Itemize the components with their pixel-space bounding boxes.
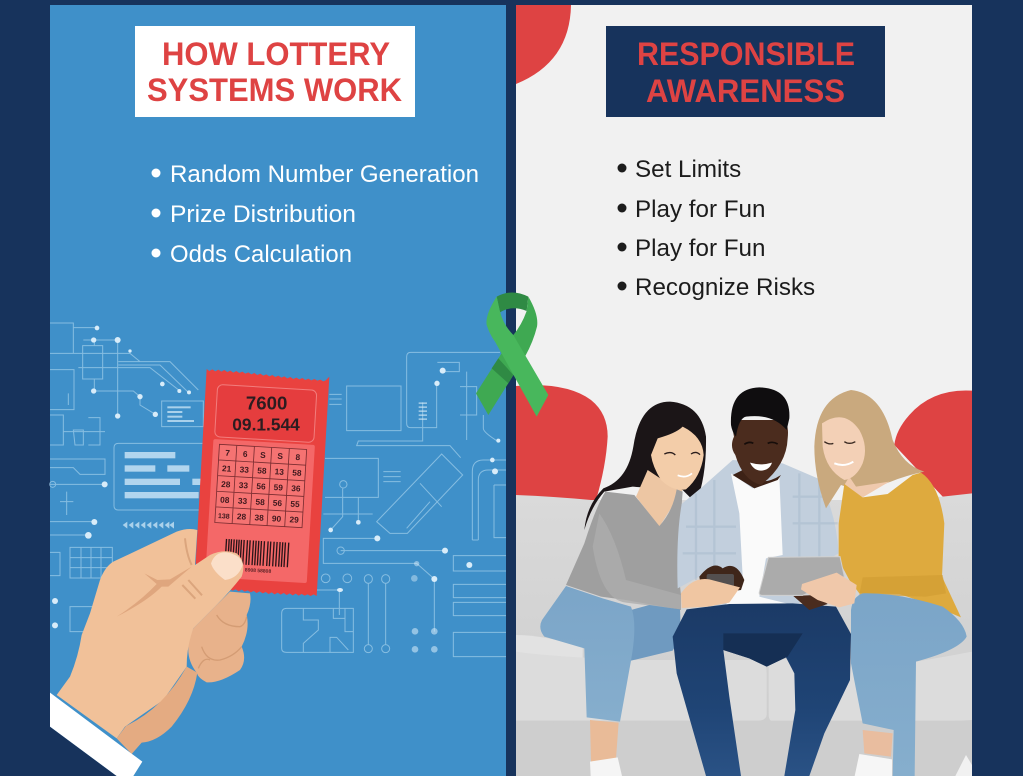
- shirt cuff: [50, 693, 142, 776]
- lottery ticket: 56: [273, 498, 283, 508]
- bullet list: awareness: [618, 156, 815, 301]
- heading box: how lottery systems work: SYSTEMS WORK: [147, 72, 402, 108]
- lottery ticket: 36: [291, 483, 301, 494]
- lottery ticket: 13: [274, 466, 285, 477]
- heading box: how lottery systems work: [135, 26, 415, 117]
- bullet list: awareness: Play for Fun: [635, 235, 765, 262]
- heading box: responsible awareness: RESPONSIBLE: [637, 36, 855, 72]
- bullet list: lottery: Random Number Generation: [170, 161, 479, 188]
- lottery ticket: 8908 58808: [245, 567, 272, 575]
- panel: how lottery systems work: [50, 5, 506, 776]
- bullet list: awareness: Recognize Risks: [635, 274, 815, 301]
- sofa: [516, 493, 972, 776]
- lottery ticket: 7600: [246, 392, 287, 413]
- bullet list: lottery: [152, 161, 479, 268]
- lottery ticket: 55: [290, 499, 300, 509]
- lottery ticket: 09.1.544: [232, 415, 300, 435]
- heading box: responsible awareness: AWARENESS: [646, 73, 845, 109]
- circuit background illustration: [50, 323, 506, 657]
- thumb nail: [211, 552, 243, 580]
- panel: responsible awareness: [516, 5, 972, 776]
- lottery ticket: 56: [256, 481, 266, 491]
- lottery ticket: 21: [222, 463, 232, 474]
- curled fingers: [188, 592, 251, 682]
- lottery ticket: 08: [220, 494, 230, 505]
- icon: green awareness ribbon: [476, 292, 548, 417]
- lottery ticket: 90: [272, 513, 282, 524]
- bullet list: awareness: Play for Fun: [635, 196, 765, 223]
- lottery ticket: 33: [238, 496, 248, 506]
- lottery ticket: 33: [239, 480, 249, 490]
- lottery ticket: S: [260, 450, 266, 460]
- lottery ticket: 38: [254, 512, 264, 523]
- woman left hand: [681, 579, 740, 608]
- lottery ticket: 59: [273, 482, 284, 493]
- man center: [673, 387, 851, 776]
- woman right: [759, 390, 967, 776]
- lottery ticket: 6: [243, 449, 248, 459]
- bullet list: lottery: Odds Calculation: [170, 241, 352, 268]
- lottery ticket: 58: [292, 467, 302, 478]
- woman left: [540, 402, 706, 776]
- palm creases: [117, 567, 192, 617]
- decorative red corner: [516, 5, 571, 84]
- photo: three friends on a sofa: [516, 385, 972, 776]
- heading box: responsible awareness: [606, 26, 885, 117]
- lottery ticket: 29: [289, 514, 299, 525]
- divider strip between panels: [506, 5, 516, 776]
- lottery ticket: 58: [257, 465, 267, 476]
- wrist shadow: [117, 667, 197, 754]
- lottery ticket: 8: [295, 452, 301, 462]
- barcode: [225, 539, 289, 567]
- bullet list: awareness: Set Limits: [635, 156, 741, 183]
- lottery ticket: 28: [221, 479, 231, 489]
- lottery ticket: 33: [239, 464, 250, 475]
- lottery ticket: 138: [218, 513, 230, 521]
- lottery ticket: 7: [225, 448, 231, 458]
- lottery ticket: 58: [255, 497, 265, 507]
- tablet: [759, 557, 844, 595]
- lottery ticket: [196, 369, 329, 596]
- decorative red blobs: [516, 385, 608, 500]
- palm and thumb: [57, 529, 243, 738]
- circuit nodes and text bars: [52, 326, 500, 653]
- lottery ticket: 28: [237, 511, 247, 522]
- heading box: how lottery systems work: HOW LOTTERY: [162, 36, 390, 72]
- hand holding ticket: [57, 529, 251, 754]
- bullet list: lottery: Prize Distribution: [170, 201, 356, 228]
- lottery ticket: S: [277, 451, 284, 461]
